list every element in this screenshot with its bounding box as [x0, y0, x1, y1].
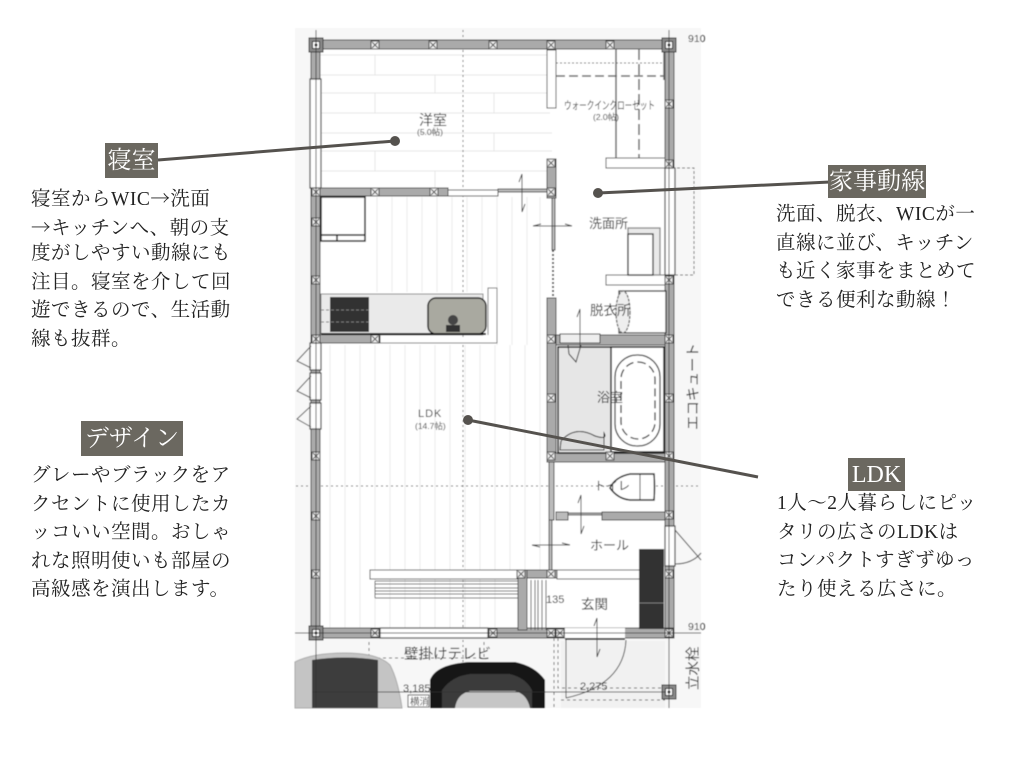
heading: LDK [848, 458, 905, 491]
text block: design: 高級感を演出します。 [31, 579, 229, 600]
room labels: 910 [688, 33, 706, 45]
room labels: 浴室 [597, 390, 623, 405]
bedroom flooring [320, 55, 552, 188]
text block: design [31, 465, 231, 600]
text block: LDK [777, 492, 977, 600]
room labels: 立水栓 [685, 646, 702, 690]
room labels: 玄関 [581, 597, 608, 612]
text block: housework route: 直線に並び、キッチン [776, 232, 974, 254]
text block: housework route: できる便利な動線！ [776, 290, 956, 310]
room labels: エコキュート [686, 343, 702, 430]
text block: housework route [776, 204, 976, 310]
heading: bedroom [105, 143, 158, 178]
room labels [403, 33, 706, 708]
thin partition walls [448, 189, 602, 570]
text block: design: ッコいい空間。おしゃ [31, 522, 231, 543]
walk-in closet [547, 50, 665, 285]
LDK flooring [330, 197, 540, 628]
text block: design: クセントに使用したカ [31, 494, 231, 514]
text block: bedroom: 寝室からWIC→洗面 [31, 183, 210, 211]
room labels: 壁掛けテレビ [404, 646, 491, 663]
heading: LDK: LDK [852, 462, 901, 488]
text block: design: れな照明使いも部屋の [31, 550, 231, 572]
room labels: 910 [688, 621, 706, 633]
room labels: トイレ [594, 479, 630, 493]
text block: bedroom [31, 183, 231, 350]
text block: bedroom: 遊できるので、生活動 [31, 300, 231, 321]
room labels: (5.0帖) [417, 127, 443, 137]
windows [310, 79, 675, 638]
washroom unit [616, 228, 666, 333]
room labels: ホール [590, 538, 629, 553]
leader line: LDK [463, 415, 758, 477]
text block: housework route: 洗面、脱衣、WICが一 [776, 204, 975, 225]
leader line: housework route [593, 182, 830, 198]
entry door opening [565, 628, 625, 639]
room labels: 洗面所 [589, 216, 628, 231]
shoe cupboard [639, 549, 664, 629]
text block: bedroom: 注目。寝室を介して回 [31, 272, 231, 292]
text block: design: グレーやブラックをア [31, 465, 231, 486]
door swing arrows [519, 174, 600, 657]
bathroom [558, 347, 664, 453]
entry porch [561, 641, 665, 708]
text block: LDK: コンパクトすぎずゆっ [777, 550, 975, 571]
heading: housework route: 家事動線 [829, 168, 925, 194]
room labels: 横消 [410, 696, 429, 708]
toilet [610, 474, 654, 500]
text block: LDK: たり使える広さに。 [777, 578, 957, 600]
stairs and entrance strips [370, 570, 518, 579]
window swings [297, 346, 701, 564]
room labels: LDK [418, 408, 442, 420]
text block: housework route: も近く家事をまとめて [776, 261, 976, 282]
balcony dotted outline [672, 168, 694, 275]
heading: design [81, 421, 183, 456]
heading: design: デザイン [85, 426, 179, 452]
room labels: 洋室 [419, 112, 447, 128]
text block: LDK: 1人～2人暮らしにピッ [777, 493, 977, 514]
room labels: (2.0帖) [593, 112, 619, 122]
dimension lines over cars [295, 30, 701, 708]
centre dotted grid lines [296, 30, 701, 708]
cars [295, 653, 545, 708]
closet in kitchen [321, 197, 365, 241]
text block: LDK: タリの広さのLDKは [777, 522, 959, 542]
room labels: 2,275 [580, 681, 608, 693]
plan background [295, 28, 701, 708]
room labels: 3,185 [403, 683, 431, 695]
room labels: (14.7帖) [415, 421, 446, 431]
room labels: ウォークインクローゼット [564, 99, 655, 112]
text block: bedroom: 度がしやすい動線にも [31, 243, 231, 264]
text block: bedroom: 線も抜群。 [31, 328, 131, 350]
room labels: 脱衣所 [590, 303, 631, 318]
walls [311, 40, 674, 638]
text block: bedroom: →キッチンへ、朝の支 [31, 212, 230, 240]
heading: bedroom: 寝室 [108, 148, 156, 174]
kitchen counter [321, 294, 483, 335]
posts [309, 38, 676, 699]
room labels: 135 [546, 594, 564, 606]
leader line: bedroom [158, 136, 400, 160]
